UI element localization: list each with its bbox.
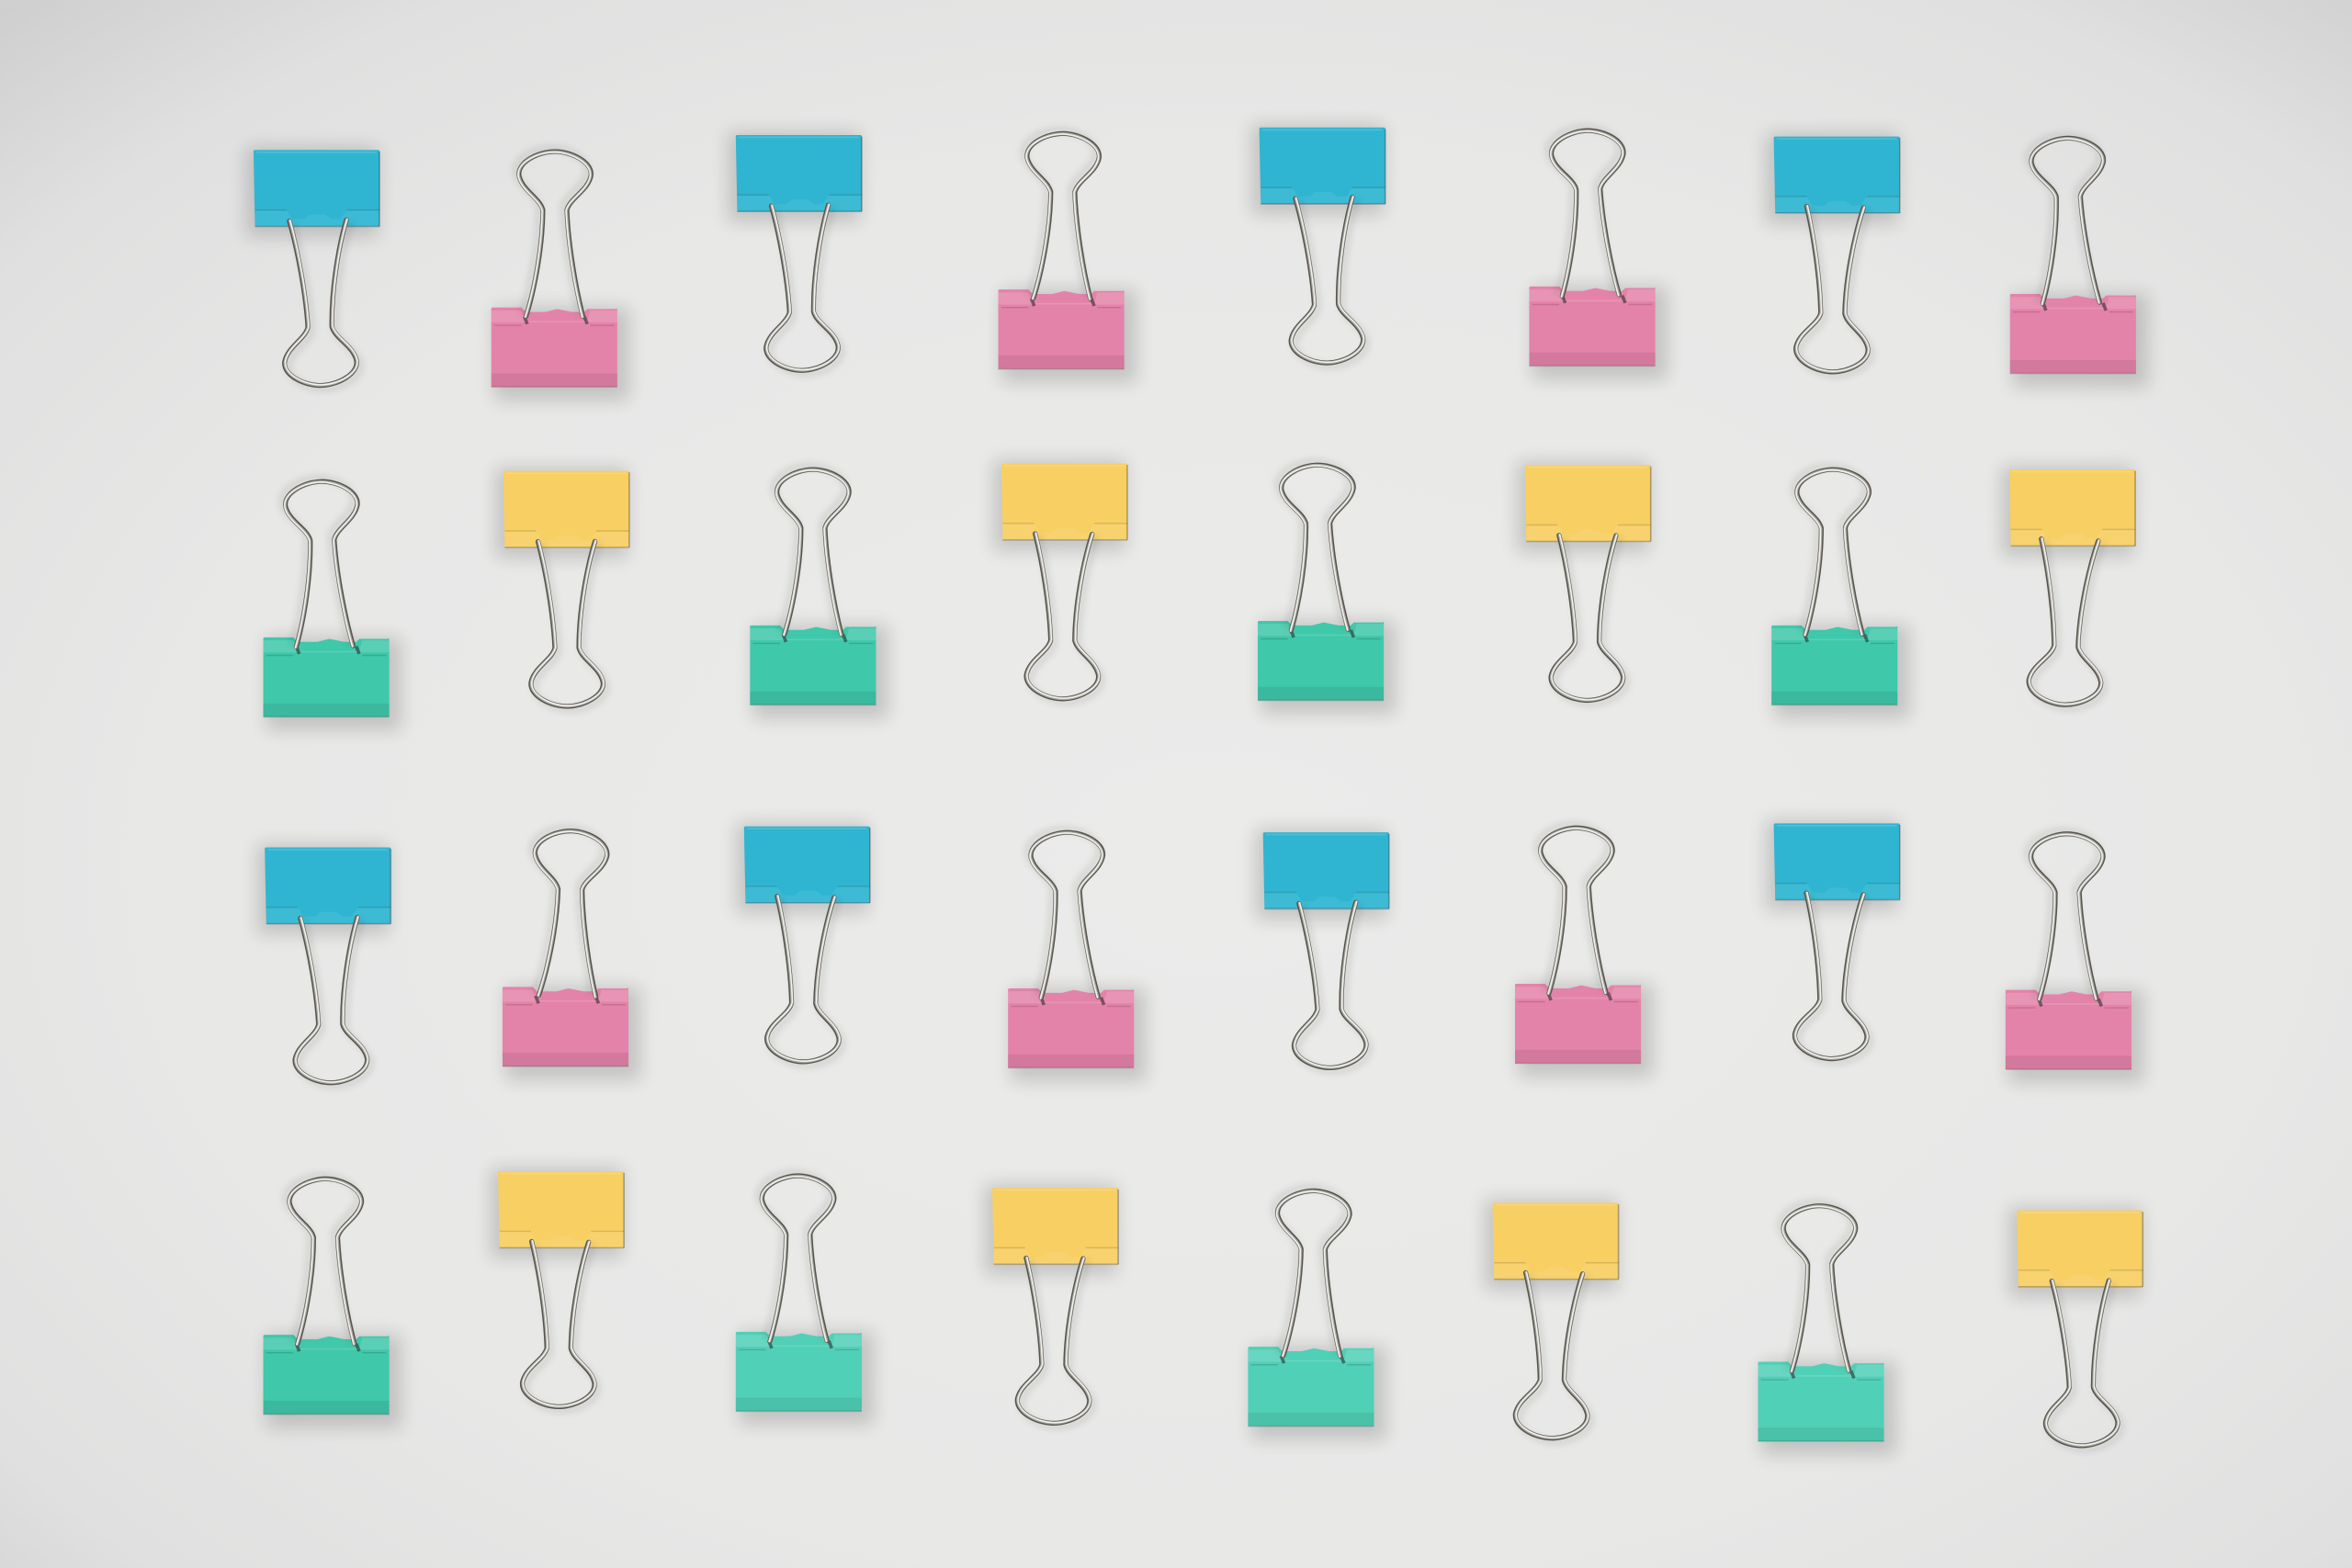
clip: pink row 1 col 6 [1529, 126, 1668, 379]
clip: pink row 3 col 4 [1008, 828, 1146, 1081]
clip: green row 2 col 5 [1258, 460, 1396, 714]
clip: blue row 1 col 7 [1766, 133, 1900, 377]
clip: green row 4 col 1 [264, 1175, 401, 1427]
clip: green row 4 col 7 [1758, 1201, 1896, 1455]
clip: blue row 3 col 1 [257, 844, 390, 1087]
clip: pink row 1 col 4 [999, 130, 1136, 382]
clip: green row 2 col 3 [750, 466, 888, 718]
clip: pink row 3 col 2 [503, 826, 640, 1080]
clip: green row 2 col 7 [1771, 466, 1909, 718]
clip: pink row 3 col 8 [2006, 829, 2143, 1083]
clip: green row 2 col 1 [264, 477, 401, 730]
clip: pink row 1 col 2 [492, 148, 629, 400]
clip: yellow row 2 col 6 [1517, 462, 1651, 705]
clip: pink row 1 col 8 [2010, 133, 2148, 387]
clip: yellow row 4 col 2 [491, 1168, 624, 1411]
clip: green row 4 col 3 [736, 1172, 874, 1425]
clip: yellow row 2 col 2 [496, 468, 629, 710]
clip: yellow row 2 col 8 [2002, 467, 2135, 710]
clip: yellow row 2 col 4 [994, 460, 1127, 703]
clip: blue row 3 col 3 [737, 823, 870, 1066]
clip: green row 4 col 5 [1248, 1187, 1386, 1439]
clip: pink row 3 col 6 [1515, 824, 1653, 1077]
clip: blue row 3 col 5 [1256, 829, 1389, 1072]
clip: blue row 1 col 1 [246, 147, 379, 389]
clip: yellow row 4 col 4 [985, 1185, 1118, 1427]
clip: blue row 1 col 3 [729, 132, 862, 375]
clip: blue row 3 col 7 [1766, 820, 1900, 1064]
clip: blue row 1 col 5 [1251, 125, 1385, 367]
clip: yellow row 4 col 8 [2009, 1207, 2143, 1450]
clip: yellow row 4 col 6 [1485, 1200, 1619, 1443]
